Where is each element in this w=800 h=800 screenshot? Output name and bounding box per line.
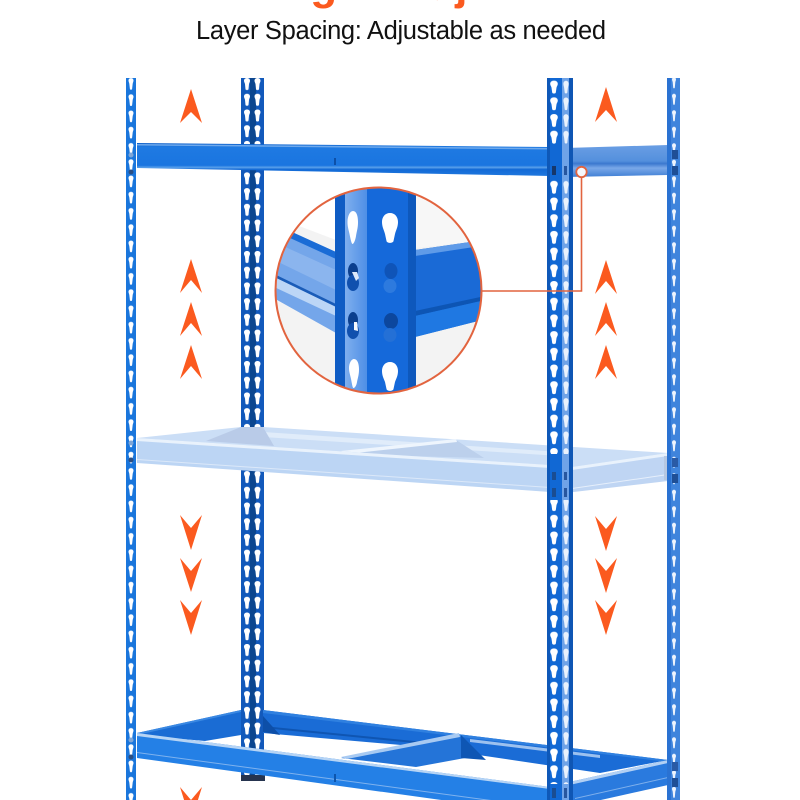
hooks [348,263,358,276]
left gusset [206,427,274,446]
crossbar and gusset [341,440,484,458]
down arrow stack right [595,516,617,635]
arrows: right column [595,87,617,635]
top shelf side beam [565,145,668,177]
front beam [137,733,550,800]
subtitle: Layer Spacing: Adjustable as needed [196,17,606,45]
leader line [481,177,582,291]
middle shelf, pale translucent [137,427,669,493]
infographic canvas [126,0,680,800]
back rail [263,710,668,773]
side beam [565,760,668,800]
lens contents [276,188,480,392]
front left post [126,78,136,800]
beam bolts [550,146,569,800]
beam bolts [672,150,678,159]
beam bolts [128,152,134,158]
back rail [137,427,668,470]
crossbar gusset [461,735,486,760]
up arrow stack left [180,259,202,379]
up arrow top left [180,89,202,123]
leader anchor [576,167,587,177]
post [335,194,345,387]
side beam [565,453,668,493]
front beam [137,438,550,492]
lens ring [276,188,482,394]
top shelf [137,143,668,177]
post foot [241,775,265,781]
far right post [667,78,680,800]
right beam [416,242,480,337]
back left post [241,78,265,781]
back post gusset [263,716,280,735]
down arrow stack left [180,515,202,635]
down arrow bottom left [180,787,202,800]
left beam [276,233,335,332]
left side beam [137,710,241,741]
up arrow top right [595,87,617,122]
large slots [382,213,398,243]
arrows: left column [180,89,202,800]
bottom shelf [137,710,668,800]
magnifier callout [270,167,587,400]
top shelf front beam [137,143,550,176]
front right post [547,78,573,800]
crossbar plate [341,734,465,767]
up arrow stack right [595,260,617,379]
